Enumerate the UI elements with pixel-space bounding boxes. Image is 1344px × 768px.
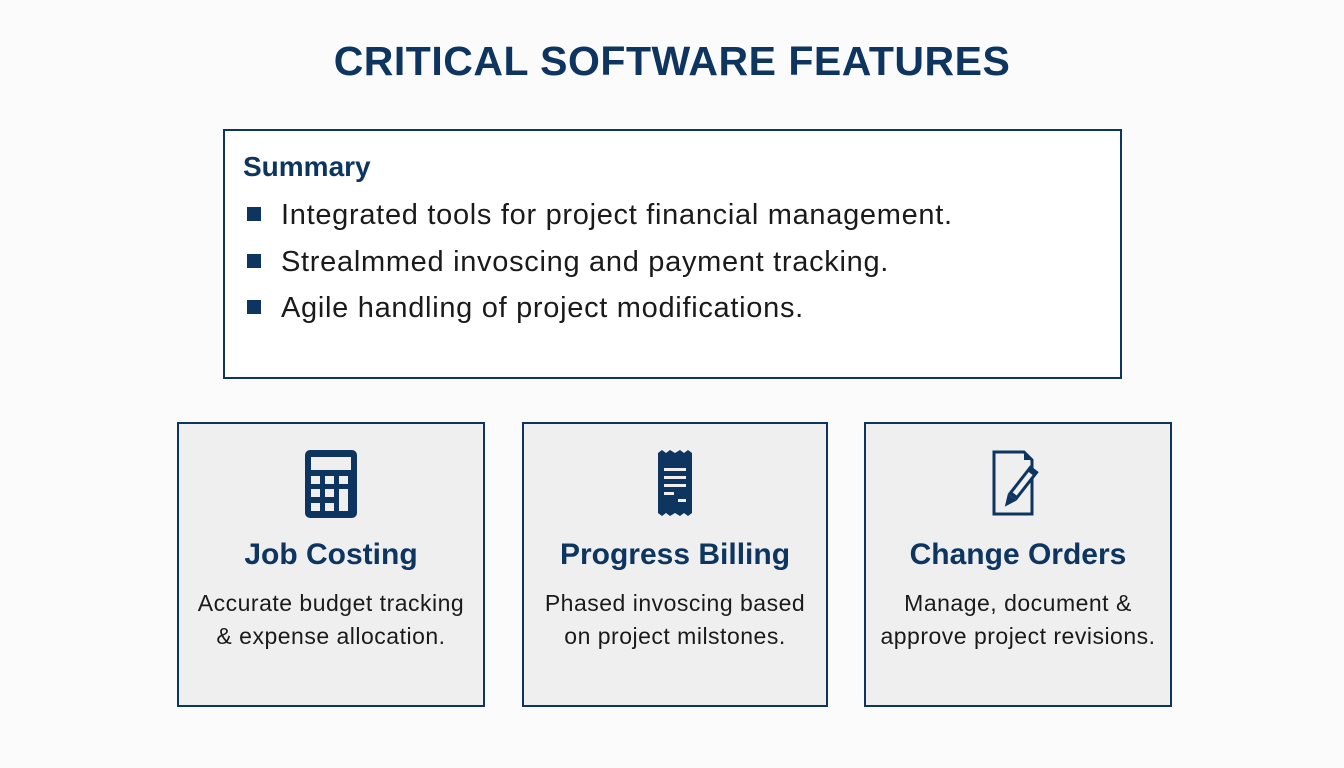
description: & expense allocation. (216, 623, 446, 649)
bullet 1: Integrated tools for project financial management. (281, 199, 953, 231)
description (880, 590, 1156, 649)
description: approve project revisions. (880, 623, 1156, 649)
description: Phased invoscing based (545, 590, 805, 616)
heading: Change Orders (910, 538, 1126, 571)
panel: change orders (864, 422, 1172, 707)
icon: calculator (305, 450, 357, 518)
bullet 2: Strealmmed invoscing and payment tracking. (281, 246, 889, 278)
panel: job costing (177, 422, 485, 707)
icon: document with pencil (992, 450, 1039, 516)
panel: progress billing (522, 422, 828, 707)
description (545, 590, 805, 649)
bullet 3: Agile handling of project modifications. (281, 292, 804, 324)
description: Accurate budget tracking (198, 590, 464, 616)
icon: receipt (658, 450, 692, 516)
title: CRITICAL SOFTWARE FEATURES (334, 38, 1010, 84)
heading: Progress Billing (560, 538, 790, 571)
description: on project milstones. (564, 623, 786, 649)
description (198, 590, 464, 649)
summary heading: Summary (243, 151, 371, 182)
heading: Job Costing (244, 538, 418, 571)
panel: summary (223, 129, 1122, 379)
description: Manage, document & (904, 590, 1132, 616)
